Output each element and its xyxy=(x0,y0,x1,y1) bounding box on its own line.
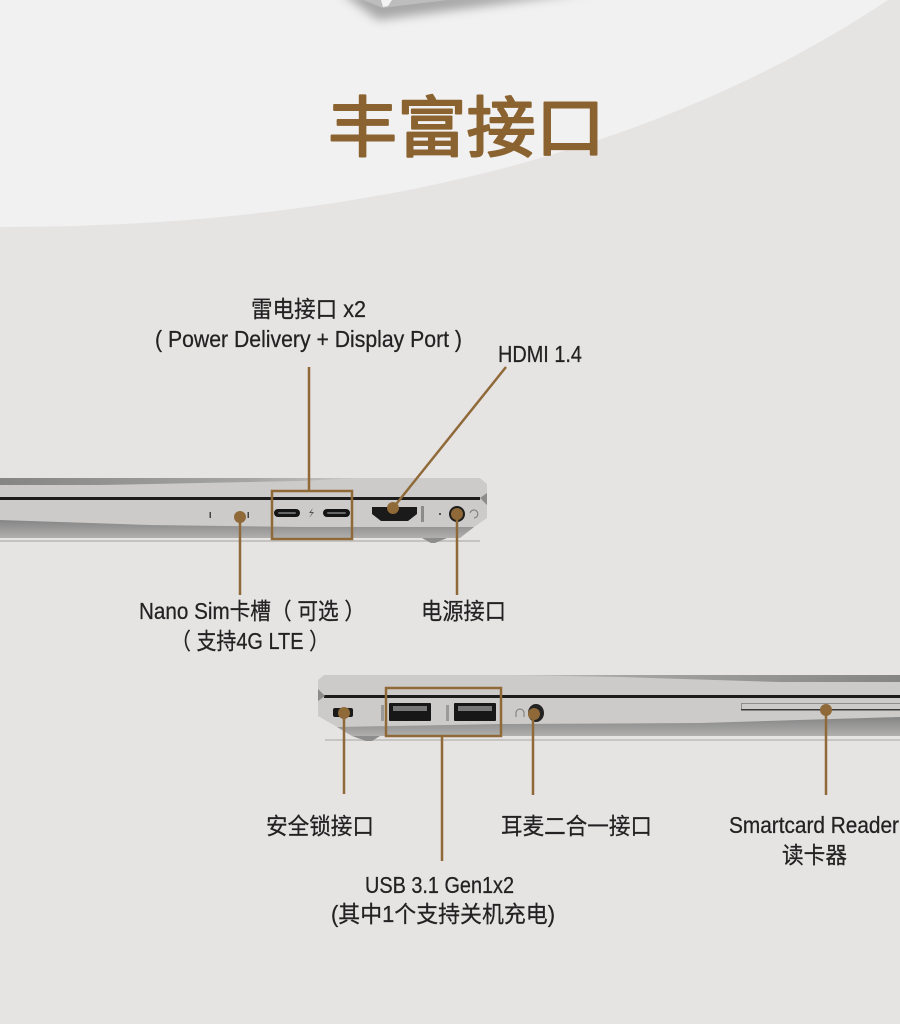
hinge line xyxy=(324,695,900,698)
laptop body xyxy=(0,478,487,538)
HDMI mark xyxy=(421,506,424,522)
USB-C port 2 xyxy=(323,509,350,517)
base shading xyxy=(0,520,474,538)
callout: HDMI xyxy=(387,341,582,514)
base shading xyxy=(337,717,900,736)
callout: Thunderbolt: 雷电接口 x2 xyxy=(251,296,366,322)
foot xyxy=(352,736,380,741)
callout: Nano Sim xyxy=(139,511,365,654)
top laptop fragment xyxy=(340,0,590,20)
callout: security lock xyxy=(266,707,374,839)
lid edge shading xyxy=(0,478,360,485)
smartcard slot xyxy=(741,703,900,710)
callout: smartcard reader xyxy=(729,704,899,868)
laptop side view: left side ports xyxy=(0,478,487,543)
USB-A port 1 xyxy=(389,703,431,721)
callout: Nano Sim: （ 支持4G LTE ） xyxy=(171,628,329,654)
USB-A port 2 xyxy=(454,703,496,721)
laptop body xyxy=(318,675,900,736)
hinge line xyxy=(0,497,480,500)
indicator marks xyxy=(210,512,211,518)
callout: Nano Sim: Nano Sim卡槽（ 可选 ） xyxy=(139,598,365,624)
laptop side view: right side ports xyxy=(318,675,900,741)
callout: security lock: 安全锁接口 xyxy=(266,813,374,839)
callout: HDMI: HDMI 1.4 xyxy=(498,341,582,367)
callout: Thunderbolt xyxy=(155,296,462,539)
lock slot xyxy=(333,708,353,717)
title: 丰富接口 xyxy=(328,75,605,171)
bottom edge xyxy=(325,739,900,741)
USB-C port 1 xyxy=(274,509,300,517)
callout: USB xyxy=(331,688,555,927)
callout: power xyxy=(421,508,506,624)
callout: USB: USB 3.1 Gen1x2 xyxy=(365,872,514,898)
hinge notch xyxy=(480,493,487,505)
callout: smartcard reader: 读卡器 xyxy=(782,842,847,868)
USB mark 2 xyxy=(446,705,449,721)
light curved header panel xyxy=(0,0,888,227)
thunderbolt glyph xyxy=(309,508,314,518)
callout: headset jack xyxy=(501,708,652,839)
callout: headset jack: 耳麦二合一接口 xyxy=(501,813,652,839)
lid edge shading xyxy=(500,675,900,682)
USB mark 1 xyxy=(381,705,384,721)
power jack xyxy=(449,506,465,522)
bottom edge xyxy=(0,540,480,542)
callout: USB: (其中1个支持关机充电) xyxy=(331,901,555,927)
audio jack xyxy=(528,704,544,722)
foot xyxy=(422,538,447,543)
callout: Thunderbolt: ( Power Delivery + Display Port ) xyxy=(155,326,462,352)
hinge notch xyxy=(318,689,325,701)
HDMI port xyxy=(372,507,417,521)
callout: power: 电源接口 xyxy=(421,598,506,624)
headset glyph xyxy=(516,709,524,717)
